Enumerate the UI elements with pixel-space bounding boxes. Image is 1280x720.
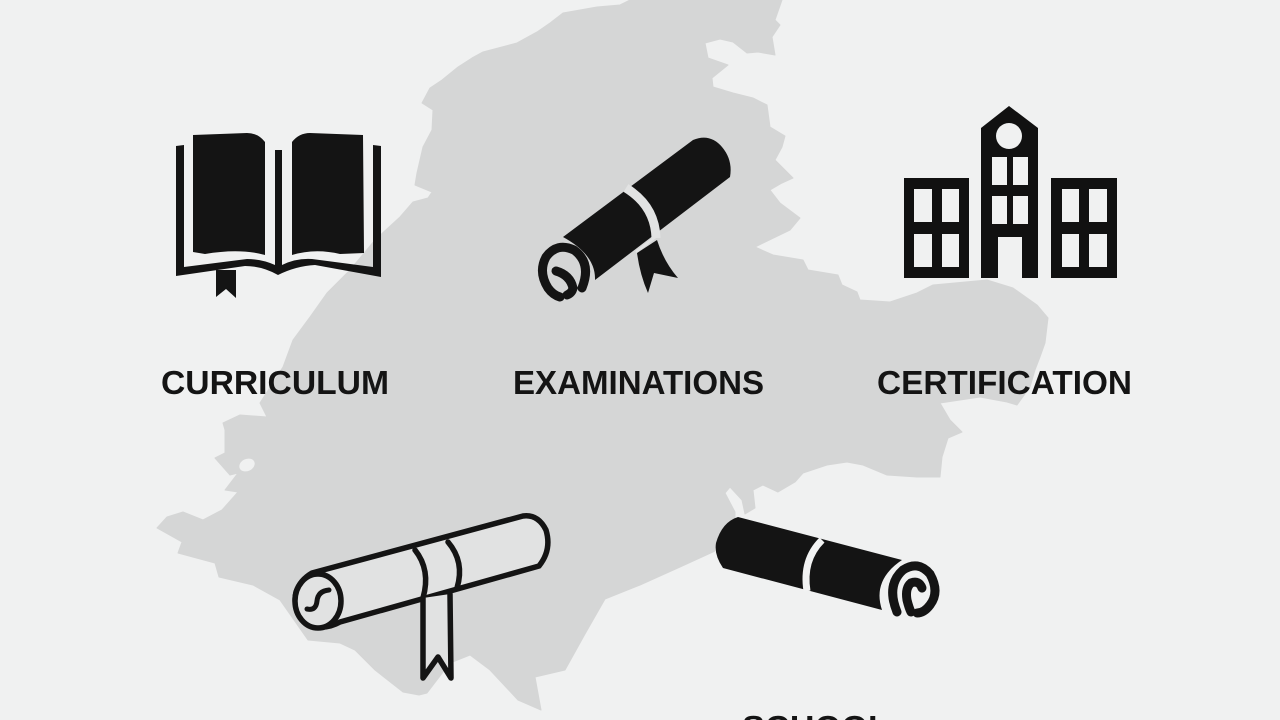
diploma band xyxy=(626,188,656,238)
icon: outlined diploma scroll xyxy=(295,516,548,678)
book cover and spine xyxy=(176,145,381,277)
label: curriculum: CURRICULUM xyxy=(161,365,389,402)
diploma ribbon gap xyxy=(636,235,658,252)
left wing windows xyxy=(914,189,959,267)
scroll hanging ribbon xyxy=(423,594,451,678)
swirl inner curl xyxy=(906,582,922,612)
map silhouette xyxy=(157,0,1048,710)
label: examinations: EXAMINATIONS xyxy=(513,365,764,402)
icon: school building (certification) xyxy=(904,106,1117,278)
label: certification: CERTIFICATION xyxy=(877,365,1132,402)
scroll outline xyxy=(295,516,548,627)
diploma roll body xyxy=(563,138,731,280)
tower windows xyxy=(992,157,1028,224)
left wing xyxy=(904,178,969,278)
swirl inner curl xyxy=(556,271,573,295)
central tower xyxy=(981,106,1038,278)
book right page xyxy=(292,133,364,255)
swirl outer ring xyxy=(893,566,935,613)
scroll band arcs xyxy=(415,542,460,598)
book left page xyxy=(193,133,265,255)
diploma ribbon xyxy=(637,240,678,293)
scroll end ellipse xyxy=(295,574,341,628)
book bookmark xyxy=(216,270,236,298)
right wing xyxy=(1051,178,1117,278)
icon: black diploma scroll xyxy=(716,517,935,613)
scroll band xyxy=(806,540,822,591)
scroll end squiggle xyxy=(307,590,329,609)
scroll end swirl xyxy=(893,566,935,613)
icon: rolled diploma with ribbon (examinations) xyxy=(542,138,731,297)
diploma end swirl xyxy=(542,247,586,297)
tower round window xyxy=(996,123,1022,149)
icon: open book (curriculum) xyxy=(176,133,381,298)
right wing windows xyxy=(1062,189,1107,267)
swirl outer ring xyxy=(542,247,586,297)
scroll body xyxy=(716,517,902,610)
map inland gap xyxy=(237,456,257,474)
